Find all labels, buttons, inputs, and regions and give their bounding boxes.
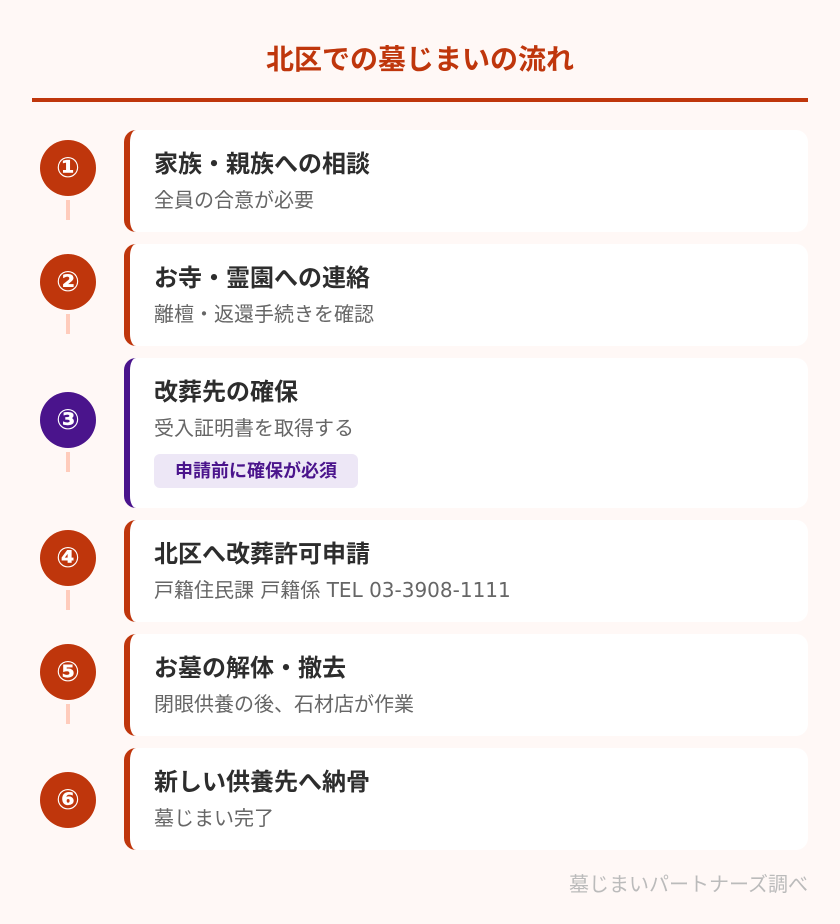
step 3 badge <box>154 454 358 488</box>
panel: step 3 <box>124 358 808 508</box>
step 2 heading: お寺・霊園への連絡 <box>154 264 370 292</box>
step 2 text: 離檀・返還手続きを確認 <box>154 302 374 326</box>
step 5 text: 閉眼供養の後、石材店が作業 <box>154 692 414 716</box>
step 5 heading: お墓の解体・撤去 <box>154 654 346 682</box>
connector 3 <box>66 452 70 472</box>
step 1 text: 全員の合意が必要 <box>154 188 314 212</box>
step 1 marker: ① <box>56 151 80 184</box>
step 2 marker: ② <box>56 265 80 298</box>
step 1 heading: 家族・親族への相談 <box>154 150 370 178</box>
step 3 marker: ③ <box>56 403 80 436</box>
panel: step 6 <box>124 748 808 850</box>
step 6 marker: ⑥ <box>56 783 80 816</box>
step 4 marker: ④ <box>56 541 80 574</box>
panel: step 1 <box>124 130 808 232</box>
panel: step 4 <box>124 520 808 622</box>
connector 2 <box>66 314 70 334</box>
step 6 heading: 新しい供養先へ納骨 <box>154 768 370 796</box>
step 5 marker: ⑤ <box>56 655 80 688</box>
connector 1 <box>66 200 70 220</box>
step 3 text: 受入証明書を取得する <box>154 416 354 440</box>
step 1 marker <box>40 140 96 196</box>
title: 北区での墓じまいの流れ <box>266 43 574 76</box>
step 5 marker <box>40 644 96 700</box>
step 4 marker <box>40 530 96 586</box>
source credit: 墓じまいパートナーズ調べ <box>569 872 808 896</box>
connector 5 <box>66 704 70 724</box>
panel: step 5 <box>124 634 808 736</box>
step 6 text: 墓じまい完了 <box>154 806 274 830</box>
panel: step 2 <box>124 244 808 346</box>
connector 4 <box>66 590 70 610</box>
step 4 text: 戸籍住民課 戸籍係 TEL 03-3908-1111 <box>154 578 511 602</box>
title rule <box>32 98 808 102</box>
step 3 badge: 申請前に確保が必須 <box>175 461 337 482</box>
step 2 marker <box>40 254 96 310</box>
step 3 heading: 改葬先の確保 <box>154 378 298 406</box>
step 3 marker <box>40 392 96 448</box>
step 4 heading: 北区へ改葬許可申請 <box>154 540 370 568</box>
step 6 marker <box>40 772 96 828</box>
